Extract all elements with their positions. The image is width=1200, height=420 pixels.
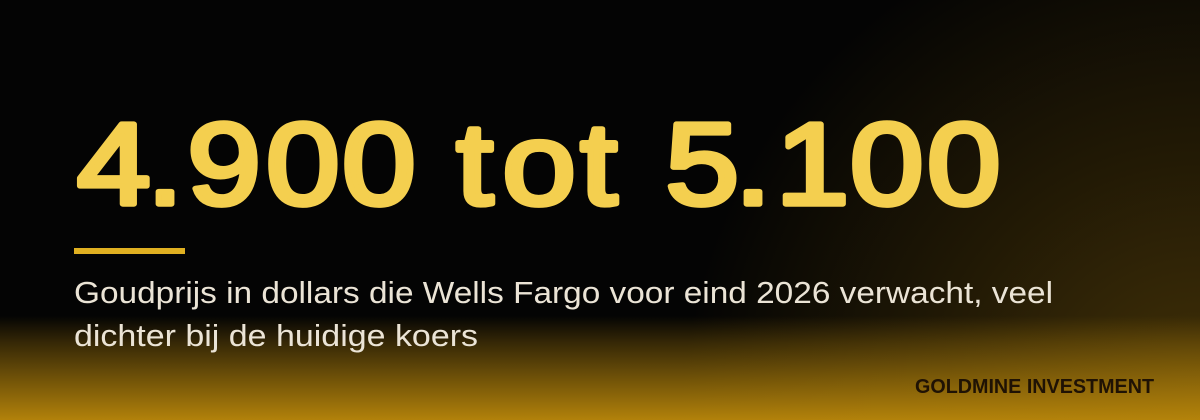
description text: Goudprijs in dollars die Wells Fargo voor eind 2026 verwacht, veel [74, 275, 1053, 310]
description text: dichter bij de huidige koers [74, 318, 478, 353]
brand label: GOLDMINE INVESTMENT [915, 376, 1154, 398]
headline: 4.900 tot 5.100 [77, 100, 1001, 229]
accent divider [74, 248, 185, 254]
description text [74, 275, 1053, 353]
